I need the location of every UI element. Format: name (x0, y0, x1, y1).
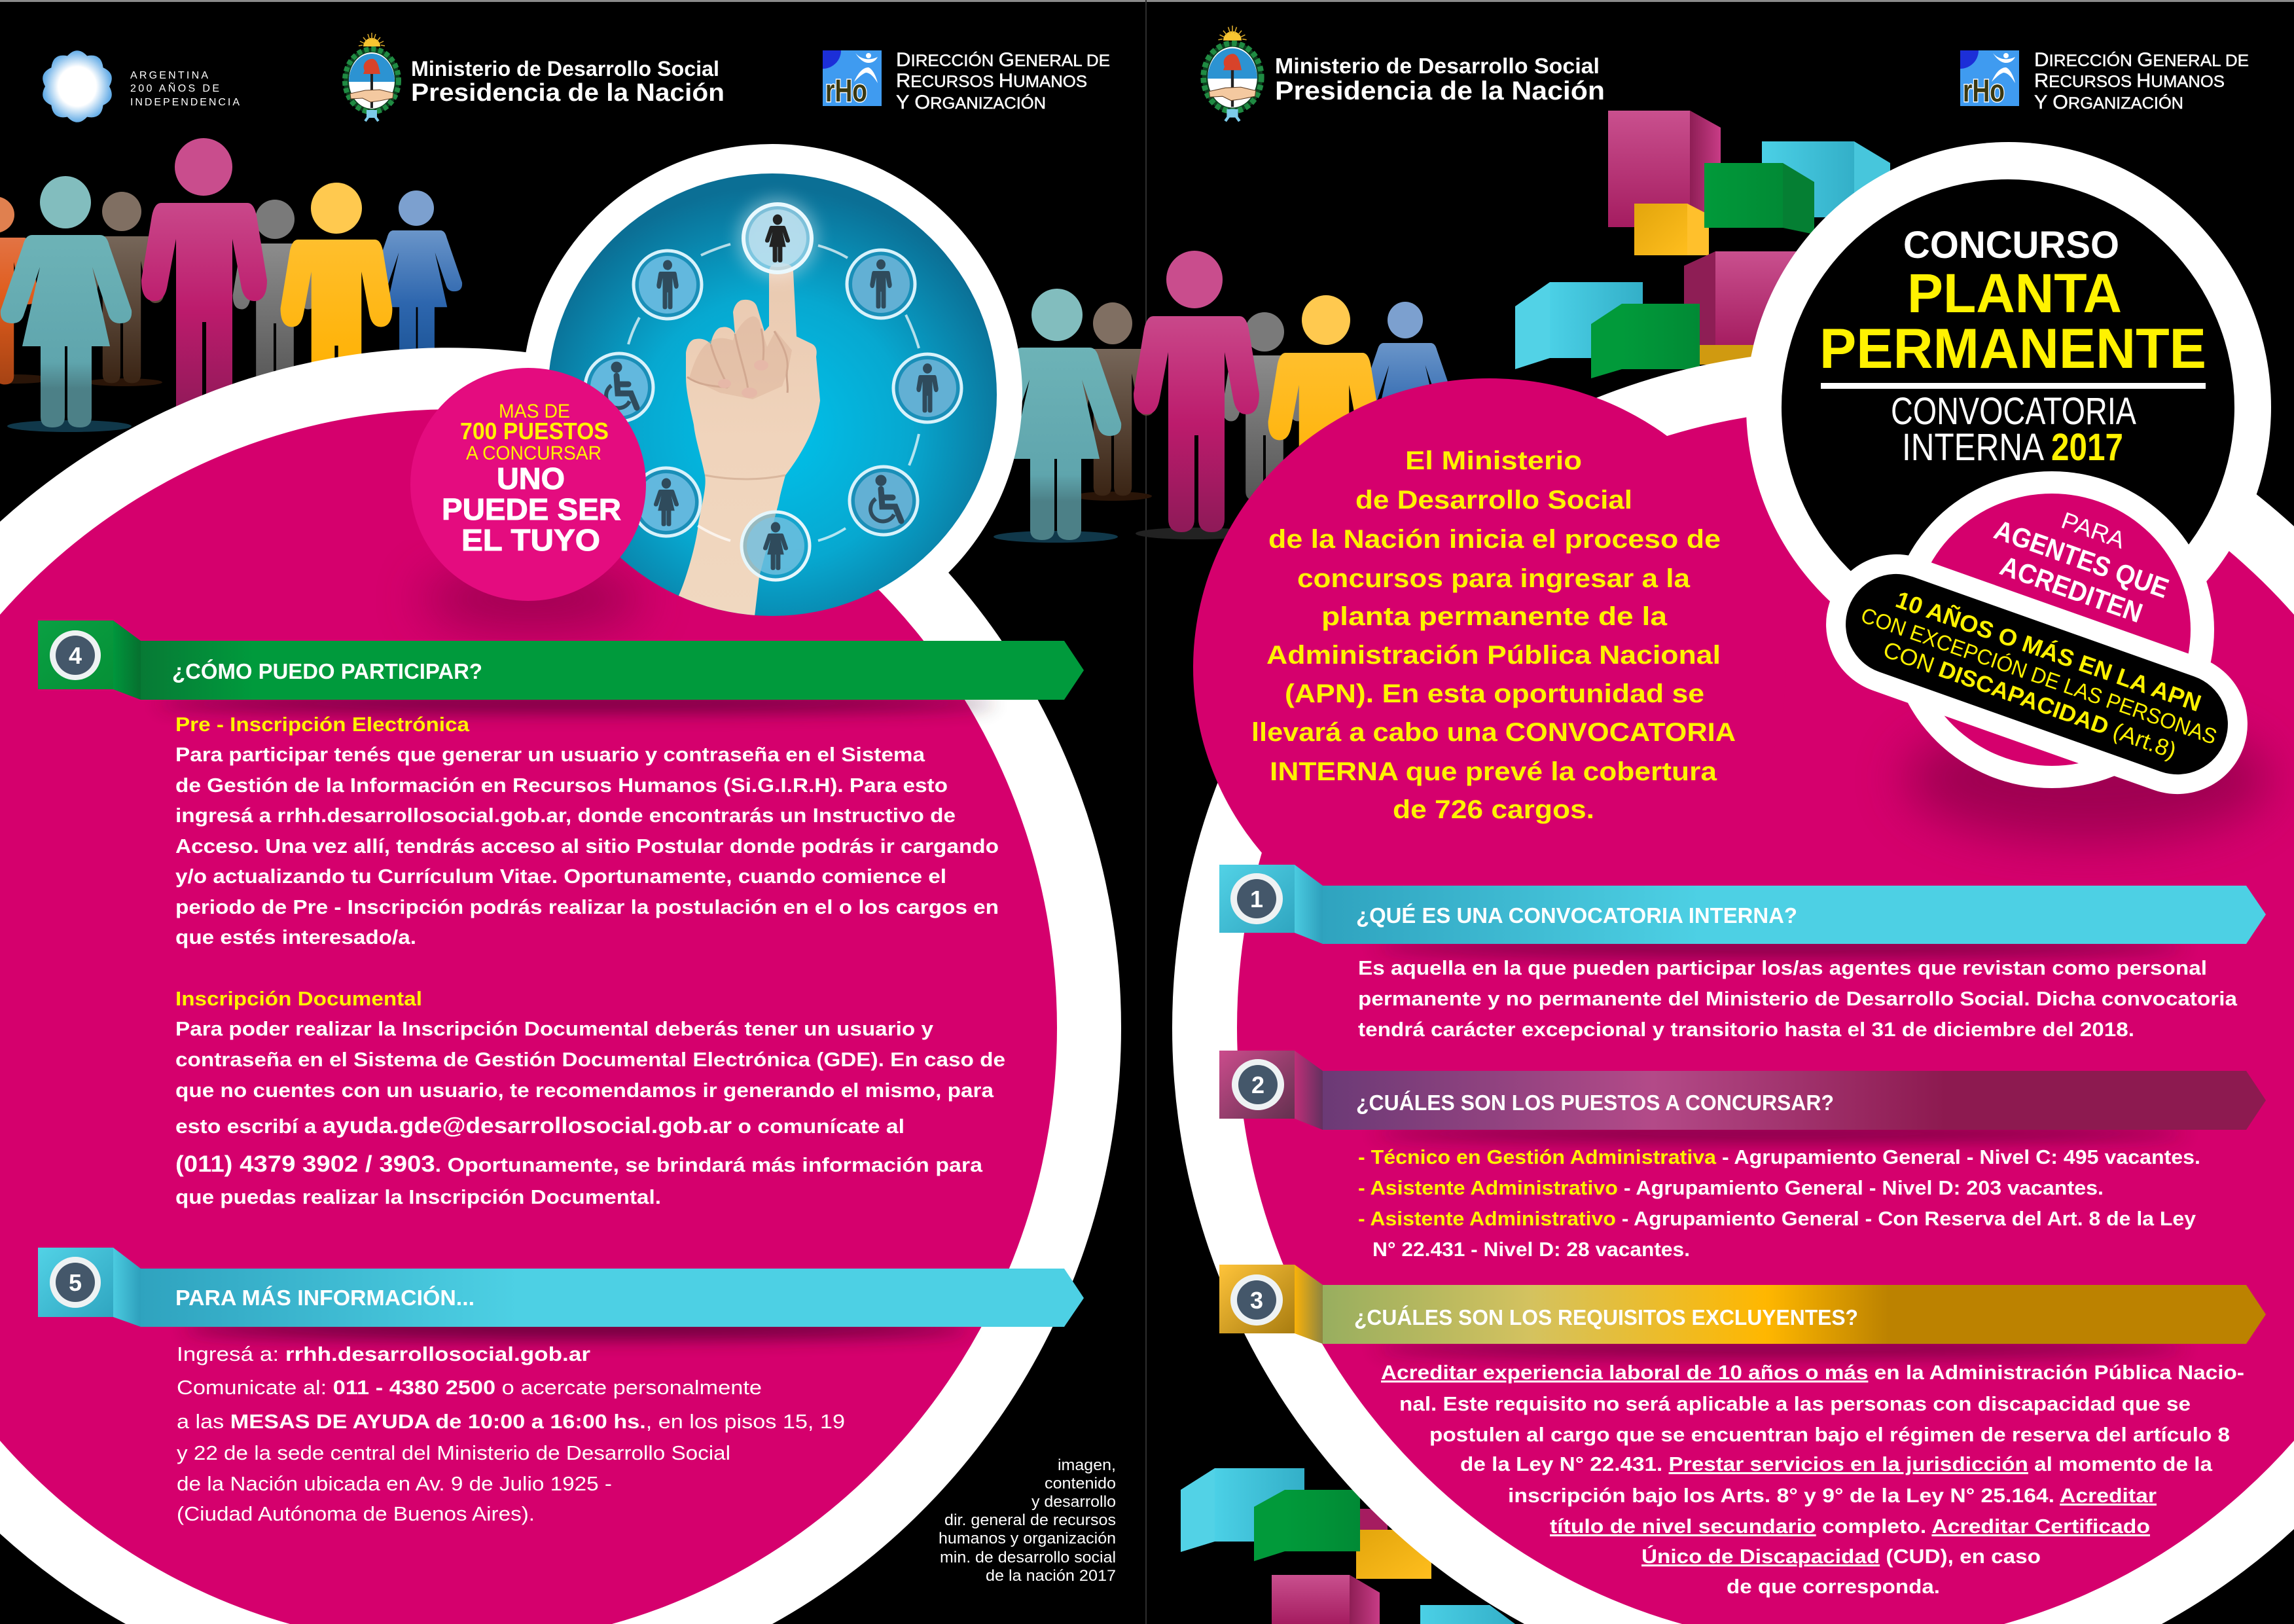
callout: circle UNO PUEDE SER EL TUYO (410, 368, 646, 601)
text: credits: contenido (1045, 1475, 1116, 1492)
text: puestos list: N° 22.431 - Nivel D: 28 vacantes. (1372, 1238, 1690, 1261)
text: intro: llevará a cabo una CONVOCATORIA (1251, 718, 1736, 747)
text: contact information: a las MESAS DE AYUDA de 10:00 a 16:00 hs. , en los pisos 15, 19 (177, 1410, 845, 1433)
text: credits: humanos y organización (939, 1530, 1116, 1547)
heading: Dirección General right (2034, 49, 2249, 113)
arcs linking icons (628, 244, 919, 541)
text: inscripción documental: contraseña en el Sistema de Gestión Documental Electrónica (GDE). En caso de (175, 1048, 1005, 1071)
text: puestos list: - Asistente Administrativo - Agrupamiento General - Con Reserva del Art. 8 de la Ley (1358, 1207, 2196, 1230)
text: intro: El Ministerio (1405, 446, 1582, 475)
callout: circle UNO PUEDE SER EL TUYO: PUEDE SER (442, 492, 621, 526)
panel: title circle: PLANTA (1907, 262, 2122, 324)
heading: Dirección General right: Y ORGANIZACIÓN (2034, 92, 2183, 113)
banner 4: cómo puedo participar: 4 (69, 642, 82, 669)
panel: left magenta circle (0, 409, 1057, 1624)
text: inscripción documental: que no cuentes con un usuario, te recomendamos ir generando el mismo, para (175, 1079, 994, 1102)
badge: requirement pill: CON EXCEPCIÓN DE LAS PERSONAS (1858, 603, 2220, 749)
text: puestos list: - Técnico en Gestión Administrativa - Agrupamiento General - Nivel C: 495 vacantes. (1358, 1146, 2200, 1168)
panel: title circle: CONVOCATORIA (1891, 390, 2136, 433)
text: requisitos: título de nivel secundario completo. Acreditar Certificado (1550, 1515, 2150, 1538)
text: credits (939, 1456, 1116, 1585)
panel: title circle (1746, 142, 2271, 672)
cubes: top right (1515, 111, 1890, 378)
text: intro: planta permanente de la (1321, 602, 1668, 631)
logo: ministerio right: Ministerio de Desarrollo Social (1275, 54, 1600, 78)
shadow under circle callout (422, 569, 645, 628)
logo: ministerio right (1202, 26, 1605, 121)
text: pre inscripción electrónica: periodo de Pre - Inscripción podrás realizar la postulación en el o los cargos en (175, 895, 999, 918)
banner 1: qué es una convocatoria interna (1219, 865, 2266, 954)
text: credits: y desarrollo (1031, 1493, 1116, 1511)
text: requisitos: Único de Discapacidad (CUD), en caso (1641, 1544, 2041, 1568)
text: intro: de Desarrollo Social (1355, 486, 1632, 514)
banner 1: qué es una convocatoria interna: 1 (1250, 886, 1263, 912)
text: intro: de 726 cargos. (1393, 795, 1594, 824)
panel: right magenta circle (1237, 409, 2294, 1624)
text: inscripción documental (175, 987, 1005, 1208)
banner 3: requisitos excluyentes (1219, 1265, 2266, 1355)
text: pre inscripción electrónica: Pre - Inscripción Electrónica (175, 713, 470, 736)
text: credits: min. de desarrollo social (940, 1549, 1116, 1566)
heading: Dirección General left: Y ORGANIZACIÓN (896, 92, 1046, 113)
badge: requirement pill (1832, 560, 2242, 788)
panel: left white ring (0, 348, 1121, 1624)
panel: title circle: PERMANENTE (1819, 317, 2206, 380)
panel: title circle: CONCURSO (1903, 224, 2119, 266)
icon: right person (893, 354, 961, 422)
text: credits: de la nación 2017 (986, 1567, 1116, 1585)
text: inscripción documental: esto escribí a ayuda.gde@desarrollosocial.gob.ar o comunícate al (175, 1113, 905, 1138)
icon: upper left person (634, 251, 702, 319)
badge: para agentes que acrediten: PARA (2058, 507, 2128, 554)
text: contact information: (Ciudad Autónoma de Buenos Aires). (177, 1502, 535, 1525)
text: requisitos: Acreditar experiencia laboral de 10 años o más en la Administración Pública Nacio- (1381, 1361, 2244, 1384)
callout: circle UNO PUEDE SER EL TUYO: 700 PUESTOS (460, 418, 609, 444)
banner 2: cuáles son los puestos (1219, 1051, 2266, 1140)
text: pre inscripción electrónica (175, 713, 999, 948)
badge: para agentes que acrediten (1890, 471, 2214, 788)
callout: circle UNO PUEDE SER EL TUYO: EL TUYO (461, 523, 600, 557)
text: requisitos: nal. Este requisito no será aplicable a las personas con discapacidad que se (1399, 1392, 2191, 1415)
logo: Argentina 200 años: 200 AÑOS DE (130, 81, 219, 94)
text: intro: Administración Pública Nacional (1266, 641, 1721, 670)
text: intro: INTERNA que prevé la cobertura (1270, 757, 1717, 786)
text: inscripción documental: Para poder realizar la Inscripción Documental deberás tener un usuario y (175, 1017, 934, 1040)
callout: circle UNO PUEDE SER EL TUYO: A CONCURSAR (466, 442, 601, 464)
text: inscripción documental: Inscripción Documental (175, 987, 422, 1010)
icon: top person (737, 198, 818, 279)
text: inscripción documental: que puedas realizar la Inscripción Documental. (175, 1185, 661, 1208)
heading: Dirección General right: DIRECCIÓN GENERAL DE (2034, 49, 2249, 71)
text: puestos list: - Asistente Administrativo - Agrupamiento General - Nivel D: 203 vacantes. (1358, 1176, 2104, 1199)
text: puestos list (1358, 1146, 2200, 1261)
text: pre inscripción electrónica: Para participar tenés que generar un usuario y contraseña en el Sistema (175, 743, 925, 766)
logo: ministerio right: Presidencia de la Nación (1275, 77, 1605, 105)
logo: ministerio left (344, 33, 725, 121)
icon: lower right wheelchair (850, 467, 918, 535)
people group: center (990, 251, 1452, 545)
text: contact information: Ingresá a: rrhh.desarrollosocial.gob.ar (177, 1343, 590, 1365)
shadow below pill (1905, 717, 2271, 841)
panel: orb white ring (522, 144, 1022, 645)
logo: Argentina 200 años: INDEPENDENCIA (130, 97, 240, 108)
banner 5: para más información: 5 (69, 1269, 82, 1296)
text: requisitos: postulen al cargo que se encuentran bajo el régimen de reserva del artículo 8 (1429, 1423, 2230, 1446)
people group: left (0, 138, 462, 432)
logo: ministerio left: Ministerio de Desarrollo Social (411, 57, 719, 81)
text: contact information: Comunicate al: 011 - 4380 2500 o acercate personalmente (177, 1376, 762, 1399)
orb: people network with hand (548, 173, 997, 622)
text: pre inscripción electrónica: ingresá a rrhh.desarrollosocial.gob.ar, donde encontrarás un Instructivo de (175, 804, 956, 827)
badge: para agentes que acrediten: ACREDITEN (1996, 550, 2147, 628)
logo: rHo right: rHo (1963, 74, 2005, 109)
text: pre inscripción electrónica: que estés interesado/a. (175, 926, 416, 948)
icon: left wheelchair (585, 353, 653, 422)
text: requisitos (1381, 1361, 2244, 1598)
text: intro: concursos para ingresar a la (1297, 564, 1691, 593)
text: contact information (177, 1343, 845, 1525)
text: inscripción documental: (011) 4379 3902 / 3903 . Oportunamente, se brindará más información para (175, 1151, 983, 1177)
logo: rHo left (823, 50, 882, 109)
text: intro: de la Nación inicia el proceso de (1268, 525, 1721, 554)
text: convocatoria interna: permanente y no permanente del Ministerio de Desarrollo Social. Dicha convocatoria (1358, 987, 2238, 1010)
banner 2: cuáles son los puestos: ¿CUÁLES SON LOS PUESTOS A CONCURSAR? (1356, 1091, 1834, 1115)
logo: Argentina 200 años (43, 50, 240, 122)
text: contact information: de la Nación ubicada en Av. 9 de Julio 1925 - (177, 1472, 612, 1495)
panel: right white ring (1172, 350, 2294, 1624)
logo: rHo left: rHo (825, 74, 867, 109)
heading: Dirección General left: DIRECCIÓN GENERAL DE (896, 49, 1110, 71)
banner 1: qué es una convocatoria interna: ¿QUÉ ES UNA CONVOCATORIA INTERNA? (1356, 903, 1797, 928)
banner 3: requisitos excluyentes: ¿CUÁLES SON LOS REQUISITOS EXCLUYENTES? (1354, 1305, 1858, 1329)
text: pre inscripción electrónica: y/o actualizando tu Currículum Vitae. Oportunamente, cuando comience el (175, 865, 946, 888)
logo: Argentina 200 años: ARGENTINA (130, 70, 208, 81)
callout: circle UNO PUEDE SER EL TUYO: MAS DE (499, 401, 570, 422)
banner 3: requisitos excluyentes: 3 (1250, 1287, 1263, 1314)
heading: Dirección General right: RECURSOS HUMANOS (2034, 70, 2225, 92)
callout: circle UNO PUEDE SER EL TUYO: UNO (497, 461, 565, 496)
heading: Dirección General left (896, 49, 1110, 113)
text: convocatoria interna: Es aquella en la que pueden participar los/as agentes que revistan como personal (1358, 956, 2207, 979)
text: requisitos: de la Ley N° 22.431. Prestar servicios en la jurisdicción al momento de la (1460, 1453, 2213, 1475)
banner 5: para más información (38, 1248, 1084, 1338)
banner 2: cuáles son los puestos: 2 (1251, 1072, 1264, 1098)
text: intro (1251, 446, 1736, 824)
banner 4: cómo puedo participar: ¿CÓMO PUEDO PARTICIPAR? (172, 659, 482, 683)
text: credits: imagen, (1058, 1456, 1116, 1474)
banner 4: cómo puedo participar (38, 621, 1084, 712)
icon: bottom person (742, 512, 810, 580)
text: pre inscripción electrónica: de Gestión de la Información en Recursos Humanos (Si.G.I.R.H). Para esto (175, 774, 948, 797)
panel: title circle: INTERNA 2017 (1902, 426, 2123, 469)
icon: hand (679, 263, 820, 622)
text: convocatoria interna: tendrá carácter excepcional y transitorio hasta el 31 de diciembre del 2018. (1358, 1018, 2134, 1041)
badge: requirement pill: CON DISCAPACIDAD (Art.8) (1880, 637, 2179, 764)
cubes: bottom (1181, 1468, 1515, 1624)
panel: intro lobe (1193, 378, 1786, 957)
icon: upper right person (847, 250, 915, 318)
logo: ministerio left: Presidencia de la Nación (411, 79, 725, 107)
badge: para agentes que acrediten: AGENTES QUE (1990, 514, 2173, 604)
banner 5: para más información: PARA MÁS INFORMACIÓN... (175, 1286, 475, 1310)
heading: Dirección General left: RECURSOS HUMANOS (896, 70, 1087, 92)
text: pre inscripción electrónica: Acceso. Una vez allí, tendrás acceso al sitio Postular donde podrás ir cargando (175, 835, 999, 857)
text: convocatoria interna (1358, 956, 2238, 1041)
text: intro: (APN). En esta oportunidad se (1285, 679, 1704, 708)
logo: rHo right (1960, 50, 2019, 109)
icon: lower left person (632, 468, 700, 536)
text: contact information: y 22 de la sede central del Ministerio de Desarrollo Social (177, 1441, 730, 1464)
badge: requirement pill: 10 AÑOS O MÁS EN LA APN (1892, 585, 2205, 717)
text: requisitos: de que corresponda. (1727, 1575, 1940, 1598)
text: requisitos: inscripción bajo los Arts. 8° y 9° de la Ley N° 25.164. Acreditar (1508, 1484, 2157, 1507)
text: credits: dir. general de recursos (944, 1511, 1116, 1529)
